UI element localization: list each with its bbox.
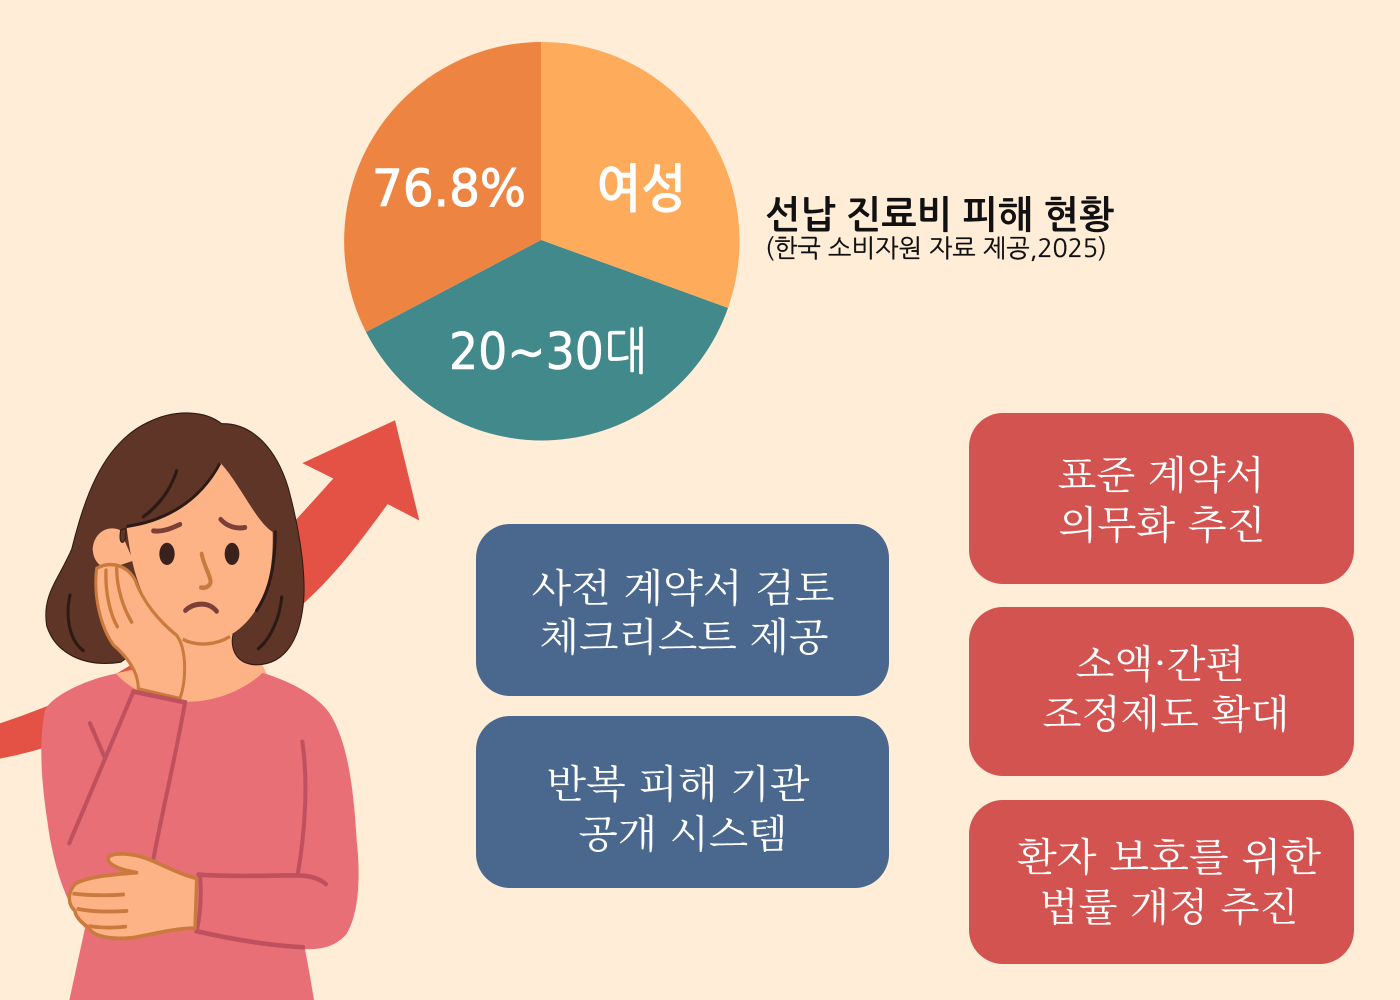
- nose and mouth: [185, 554, 217, 611]
- cheek hand: [96, 565, 185, 699]
- label: women: 여성: [596, 163, 686, 215]
- neck: [115, 626, 267, 702]
- panel: standard contract: [969, 413, 1354, 584]
- ear: [93, 528, 133, 568]
- panel: standard contract: 표준 계약서: [1058, 445, 1264, 501]
- sweater: [41, 673, 359, 1000]
- panel: checklist: 체크리스트 제공: [540, 607, 828, 663]
- fringe line: [127, 463, 220, 526]
- lower hand: [69, 854, 197, 938]
- label: 20 to 30s: 20~30대: [449, 323, 647, 382]
- panel: small claims mediation: 조정제도 확대: [1042, 684, 1290, 740]
- panel: legal revision: [969, 800, 1354, 964]
- panel: disclosure: 공개 시스템: [578, 804, 788, 860]
- label: 76.8%: 76.8%: [372, 160, 526, 219]
- eyebrows and eyes: [153, 519, 245, 565]
- panel: legal revision: 법률 개정 추진: [1040, 877, 1298, 933]
- sweater fold lines: [69, 692, 326, 947]
- pie chart: [344, 42, 740, 440]
- arrow: rising trend: [0, 420, 419, 759]
- chart source: (한국 소비자원 자료 제공,2025): [765, 236, 1107, 261]
- face: [127, 463, 273, 645]
- hair strands: [68, 532, 282, 651]
- panel: legal revision: 환자 보호를 위한: [1017, 827, 1321, 883]
- panel: standard contract: 의무화 추진: [1058, 495, 1266, 551]
- chart title: 선납 진료비 피해 현황: [765, 195, 1114, 234]
- hair: [46, 413, 304, 665]
- illustration: worried woman: [0, 413, 419, 1000]
- pie slice: share: [344, 42, 541, 332]
- panel: small claims mediation: 소액·간편: [1076, 634, 1244, 690]
- panel: disclosure: 반복 피해 기관: [546, 754, 810, 810]
- panel: checklist: 사전 계약서 검토: [532, 558, 834, 614]
- pie slice: women: [541, 42, 740, 308]
- panel: disclosure: [476, 716, 889, 888]
- panel: small claims mediation: [969, 607, 1354, 776]
- jaw line: [183, 637, 230, 644]
- panel: checklist: [476, 524, 889, 696]
- pie slice: age group: [366, 240, 728, 440]
